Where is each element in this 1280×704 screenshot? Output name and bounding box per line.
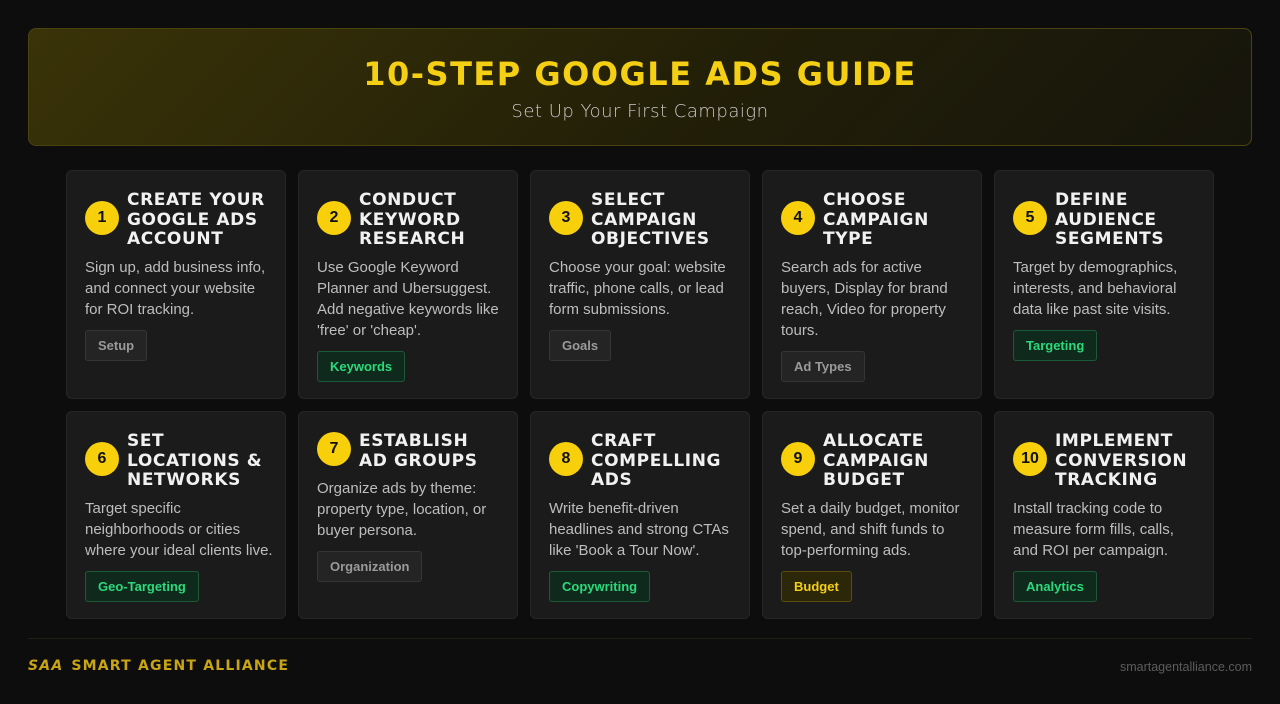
card 5: Targeting [1026,338,1084,353]
card 1: Sign up, add business info, and connect your website for ROI tracking. [85,259,265,318]
card 7: ESTABLISH AD GROUPS [359,431,478,470]
card 9: Budget [794,579,839,594]
header banner [28,28,1252,146]
card 6 [66,411,286,619]
card 6: SET LOCATIONS & NETWORKS [127,431,262,490]
card 7: Organization [330,559,409,574]
card 4: CHOOSE CAMPAIGN TYPE [823,190,929,249]
card 8 [530,411,750,619]
card 3: Choose your goal: website traffic, phone calls, or lead form submissions. [549,259,726,318]
card 7 [298,411,518,619]
card 10: Analytics [1026,579,1084,594]
card 4: Search ads for active buyers, Display for brand reach, Video for property tours. [781,259,948,339]
card 2: 2 [330,209,338,226]
card 7: Organize ads by theme: property type, location, or buyer persona. [317,480,486,539]
card 1: CREATE YOUR GOOGLE ADS ACCOUNT [127,190,265,249]
title: 10-STEP GOOGLE ADS GUIDE [363,55,917,93]
card 5 [994,170,1214,399]
card 3: SELECT CAMPAIGN OBJECTIVES [591,190,710,249]
card 9: Set a daily budget, monitor spend, and shift funds to top-performing ads. [781,500,959,559]
card 10: 10 [1021,450,1039,467]
card 4: Ad Types [794,359,852,374]
card 5: Target by demographics, interests, and behavioral data like past site visits. [1013,259,1177,318]
card 6: Geo-Targeting [98,579,186,594]
card 2: CONDUCT KEYWORD RESEARCH [359,190,465,249]
card 8: Copywriting [562,579,637,594]
card 1: 1 [98,209,106,226]
card 6: Target specific neighborhoods or cities where your ideal clients live. [85,500,273,559]
card 2: Use Google Keyword Planner and Ubersuggest. Add negative keywords like 'free' or 'cheap'. [317,259,499,339]
card 4 [762,170,982,399]
card 2 [298,170,518,399]
card 1 [66,170,286,399]
subtitle: Set Up Your First Campaign [511,101,769,122]
card 10: IMPLEMENT CONVERSION TRACKING [1055,431,1187,490]
card 9: ALLOCATE CAMPAIGN BUDGET [823,431,929,490]
card 9: 9 [794,450,802,467]
card 9 [762,411,982,619]
card 4: 4 [794,209,802,226]
card 3: 3 [562,209,570,226]
card 10 [994,411,1214,619]
card 8: Write benefit-driven headlines and strong CTAs like 'Book a Tour Now'. [549,500,729,559]
card 3 [530,170,750,399]
card 6: 6 [98,450,106,467]
card 8: 8 [562,450,570,467]
card 1: Setup [98,338,134,353]
card 5: 5 [1026,209,1034,226]
card 5: DEFINE AUDIENCE SEGMENTS [1055,190,1164,249]
card 7: 7 [330,440,338,457]
card 8: CRAFT COMPELLING ADS [591,431,721,490]
footer url: smartagentalliance.com [1120,660,1252,674]
card 2: Keywords [330,359,392,374]
footer brand: SAA SMART AGENT ALLIANCE [28,658,289,674]
card 10: Install tracking code to measure form fills, calls, and ROI per campaign. [1013,500,1174,559]
card 3: Goals [562,338,598,353]
